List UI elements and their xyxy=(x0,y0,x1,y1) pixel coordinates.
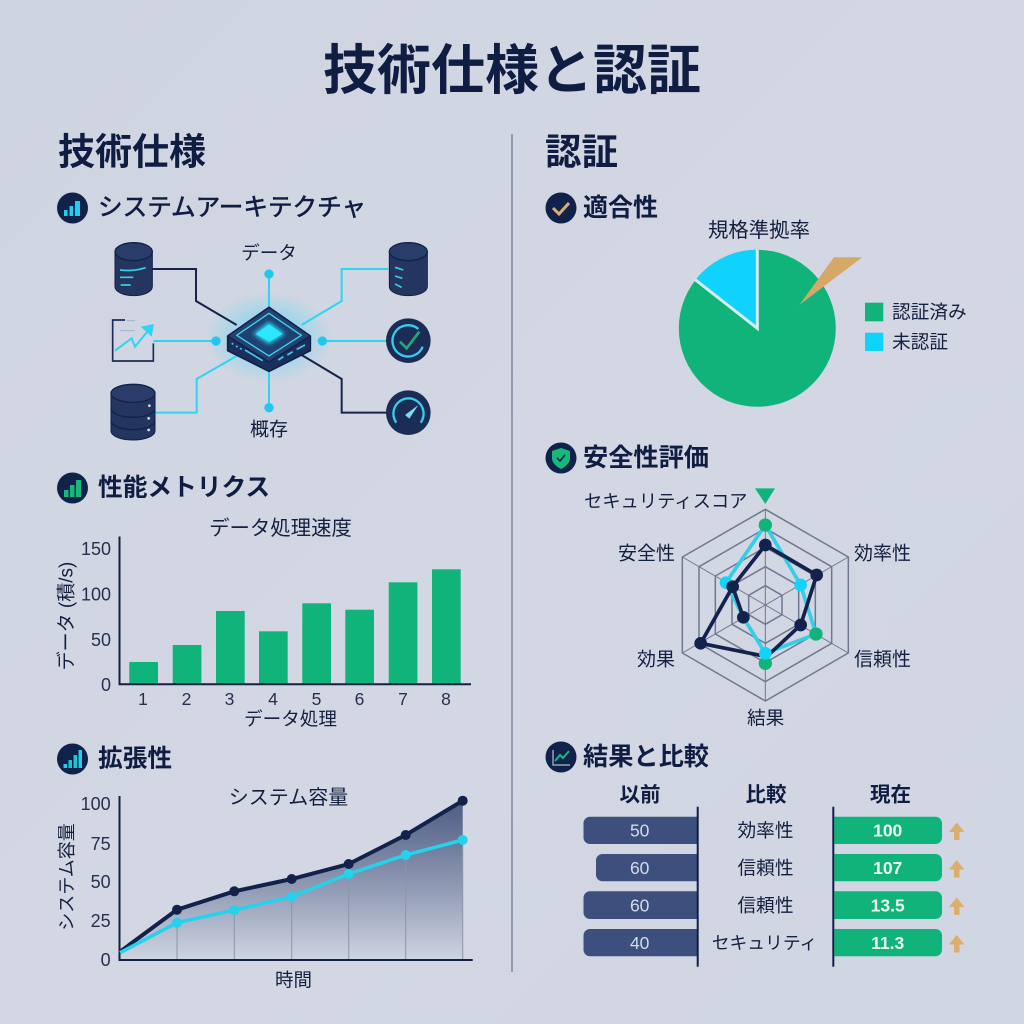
comparison table: セキュリティ xyxy=(712,933,817,953)
legend: compliance: 未認証 xyxy=(892,332,948,352)
chart title: データ処理速度 xyxy=(209,517,352,540)
title: 技術仕様と認証 xyxy=(323,41,701,101)
legend: compliance xyxy=(865,302,967,352)
bar chart: data processing speed: 100 xyxy=(81,585,111,605)
radar chart: security score: 効率性 xyxy=(854,542,911,564)
comparison table: 以前 xyxy=(620,784,660,806)
heading: performance metrics: 性能メトリクス xyxy=(98,474,270,502)
y axis label: データ (積/s) xyxy=(56,562,78,670)
icon: database top left xyxy=(115,243,152,296)
heading: technical specifications: 技術仕様 xyxy=(58,132,206,172)
panel: technical specifications xyxy=(56,132,473,990)
panel: certification xyxy=(545,132,967,967)
icon: stacked database xyxy=(111,384,155,440)
legend: compliance: 認証済み xyxy=(892,302,967,322)
comparison table: 比較 xyxy=(746,784,787,806)
radar chart: security score: 効果 xyxy=(637,648,675,670)
bar chart: data processing speed: 1 xyxy=(138,689,148,709)
chart title: standards compliance: 規格準拠率 xyxy=(708,219,810,242)
line chart: system capacity xyxy=(57,786,473,990)
label: overview: 概存 xyxy=(250,418,288,440)
bar chart: data processing speed: 150 xyxy=(81,539,111,559)
comparison table: 107 xyxy=(873,858,902,878)
icon: database top right xyxy=(389,243,427,296)
icon: architecture signal bars xyxy=(57,192,88,224)
line chart: system capacity: 25 xyxy=(91,911,111,931)
comparison table: 60 xyxy=(630,896,650,916)
radar chart: security score: 安全性 xyxy=(618,542,675,564)
radar chart: security score: セキュリティスコア xyxy=(584,490,747,512)
heading: safety evaluation: 安全性評価 xyxy=(583,444,709,472)
bar chart: data processing speed: 0 xyxy=(101,675,111,695)
comparison table: 信頼性 xyxy=(737,895,794,916)
comparison table: 60 xyxy=(630,858,650,878)
icon: trend chart xyxy=(113,320,154,361)
icon: central processor chip xyxy=(228,307,310,371)
bar chart: data processing speed: 50 xyxy=(91,630,111,650)
line chart: system capacity: 100 xyxy=(81,794,111,814)
comparison table: 現在 xyxy=(870,784,911,806)
bar chart: data processing speed: 4 xyxy=(268,689,278,709)
icon: check circle xyxy=(386,318,431,363)
bar chart: data processing speed: 3 xyxy=(225,689,234,709)
comparison table: 13.5 xyxy=(871,896,905,916)
comparison table: 11.3 xyxy=(871,933,905,953)
heading: compliance: 適合性 xyxy=(583,194,658,222)
icon: results chart xyxy=(546,742,576,772)
heading: scalability: 拡張性 xyxy=(98,744,172,772)
icon: performance bars xyxy=(57,472,88,504)
comparison table: 100 xyxy=(873,820,903,840)
bar chart: data processing speed: 7 xyxy=(398,689,408,709)
bar chart: data processing speed: 5 xyxy=(312,689,321,709)
x axis label: データ処理 xyxy=(244,708,337,730)
line chart: system capacity: 50 xyxy=(91,872,111,892)
icon: speed gauge xyxy=(386,390,431,435)
bar chart: data processing speed xyxy=(56,517,471,730)
heading: results and comparison: 結果と比較 xyxy=(583,743,709,771)
comparison table: 40 xyxy=(630,933,650,953)
diagram: system architecture xyxy=(111,242,431,440)
line chart: system capacity: 0 xyxy=(101,950,111,970)
radar chart: security score: 結果 xyxy=(747,708,785,728)
pie chart: compliance rate xyxy=(679,250,862,407)
icon: scalability bars xyxy=(57,744,88,774)
comparison table: 50 xyxy=(630,820,650,840)
bar chart: data processing speed: 8 xyxy=(441,689,451,709)
bar chart: data processing speed: 6 xyxy=(355,689,364,709)
chart title: システム容量 xyxy=(229,786,348,809)
bar chart: data processing speed: 2 xyxy=(182,689,191,709)
label: data: データ xyxy=(241,242,297,264)
radar chart: security score xyxy=(584,488,911,728)
heading: system architecture: システムアーキテクチャ xyxy=(98,194,366,222)
comparison table: 効率性 xyxy=(737,820,794,841)
icon: compliance check xyxy=(546,192,576,224)
icon: safety shield xyxy=(546,442,576,474)
comparison table xyxy=(584,784,964,967)
x axis label: 時間 xyxy=(275,970,312,990)
y axis label: システム容量 xyxy=(57,823,77,931)
radar chart: security score: 信頼性 xyxy=(854,648,911,670)
heading: certification: 認証 xyxy=(545,132,618,172)
line chart: system capacity: 75 xyxy=(91,834,111,854)
comparison table: 信頼性 xyxy=(737,858,794,878)
